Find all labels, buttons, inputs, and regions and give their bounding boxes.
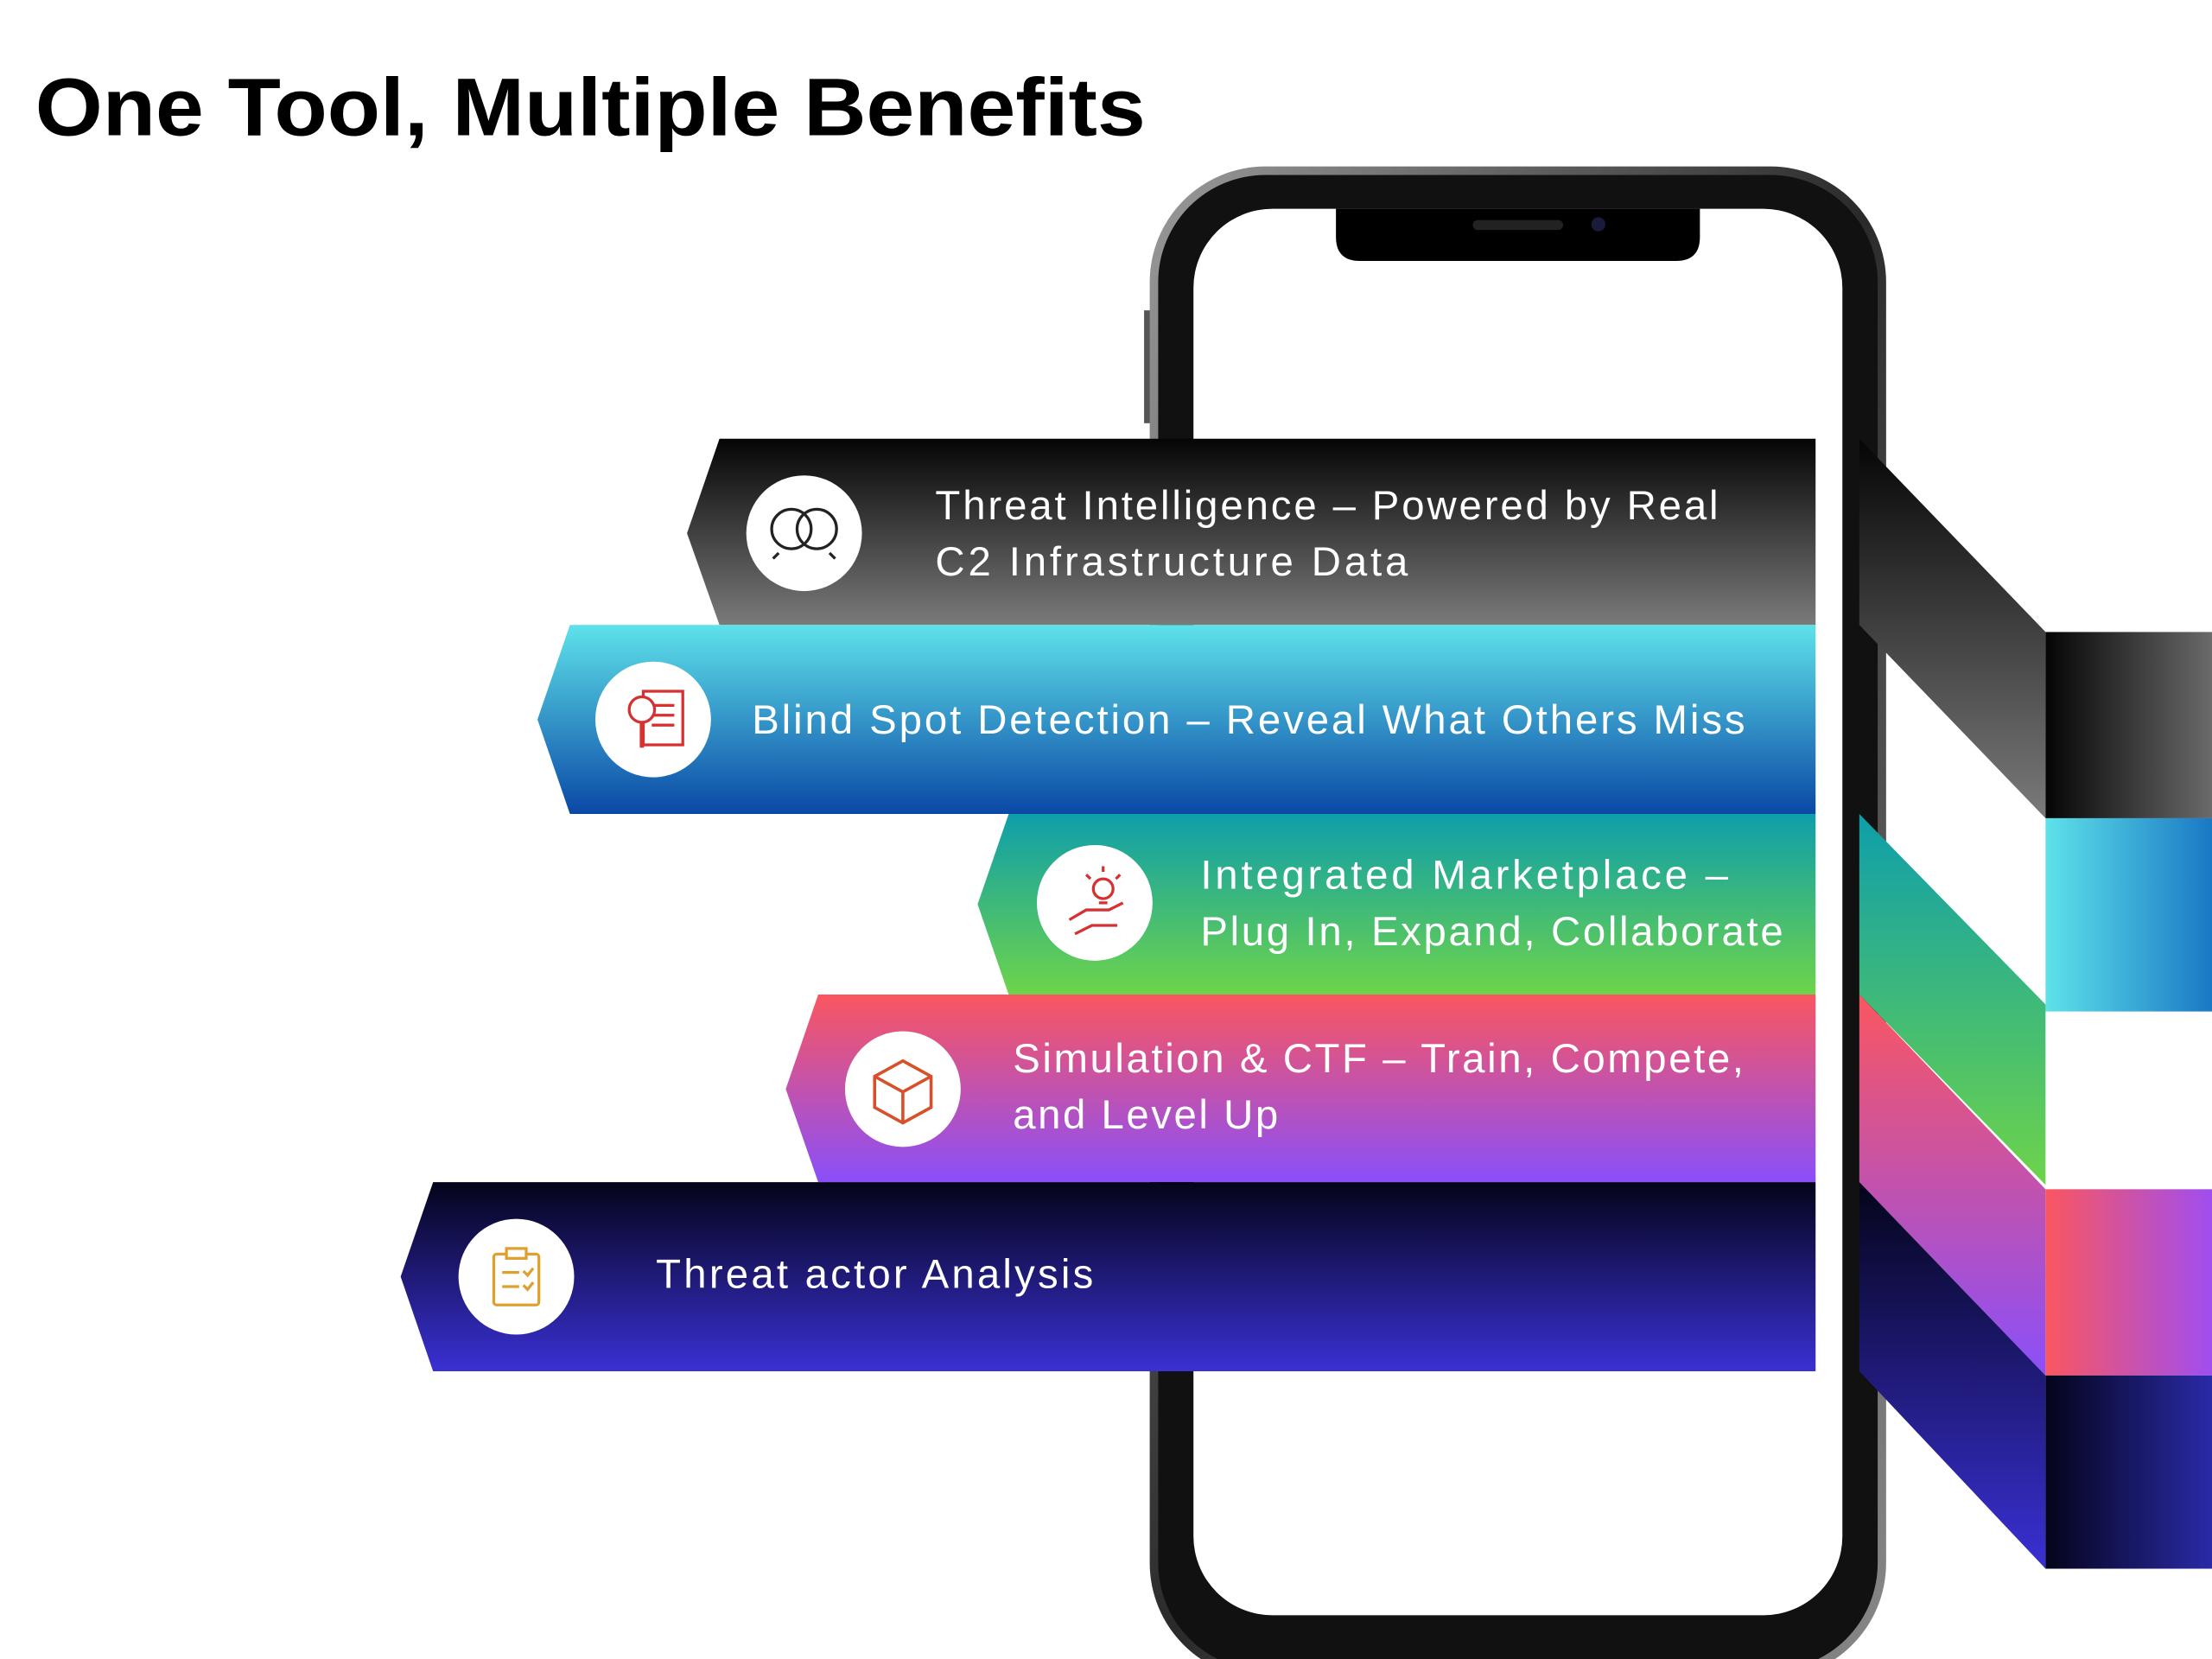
band 3: integrated marketplace [977,814,1815,995]
band 4: simulation & ctf: Simulation & CTF – Train, Compete, [1013,1036,1744,1082]
ribbon: black side [1859,439,2212,818]
band 5: threat actor analysis: Threat actor Analysis [656,1252,1093,1298]
phone notch [1336,209,1700,261]
ribbon: blue side [2045,818,2212,1012]
icon: document with magnifier [595,662,711,778]
band 5: threat actor analysis [401,1182,1815,1371]
icon: cube [845,1031,961,1147]
band 1: threat intelligence: Threat Intelligence – Powered by Real [935,483,1719,529]
ribbon: navy side [1859,1182,2212,1569]
band 3: integrated marketplace: Plug In, Expand, Collaborate [1200,909,1783,955]
ribbon: pink side [1859,995,2212,1376]
title: One Tool, Multiple Benefits [35,62,1146,154]
band 2: blind spot detection [537,625,1815,814]
ribbon: green side [1859,814,2045,1185]
band 4: simulation & ctf: and Level Up [1013,1092,1278,1138]
phone mockup [1144,167,1886,1659]
band 2: blind spot detection: Blind Spot Detection – Reveal What Others Miss [752,697,1745,743]
band 3: integrated marketplace: Integrated Marketplace – [1200,853,1729,899]
icon: two heads [747,475,862,591]
band 1: threat intelligence [687,439,1815,625]
band 4: simulation & ctf [785,995,1815,1182]
icon: hand with lightbulb [1037,845,1153,961]
band 1: threat intelligence: C2 Infrastructure Data [935,539,1408,585]
icon: clipboard checklist [459,1219,574,1334]
